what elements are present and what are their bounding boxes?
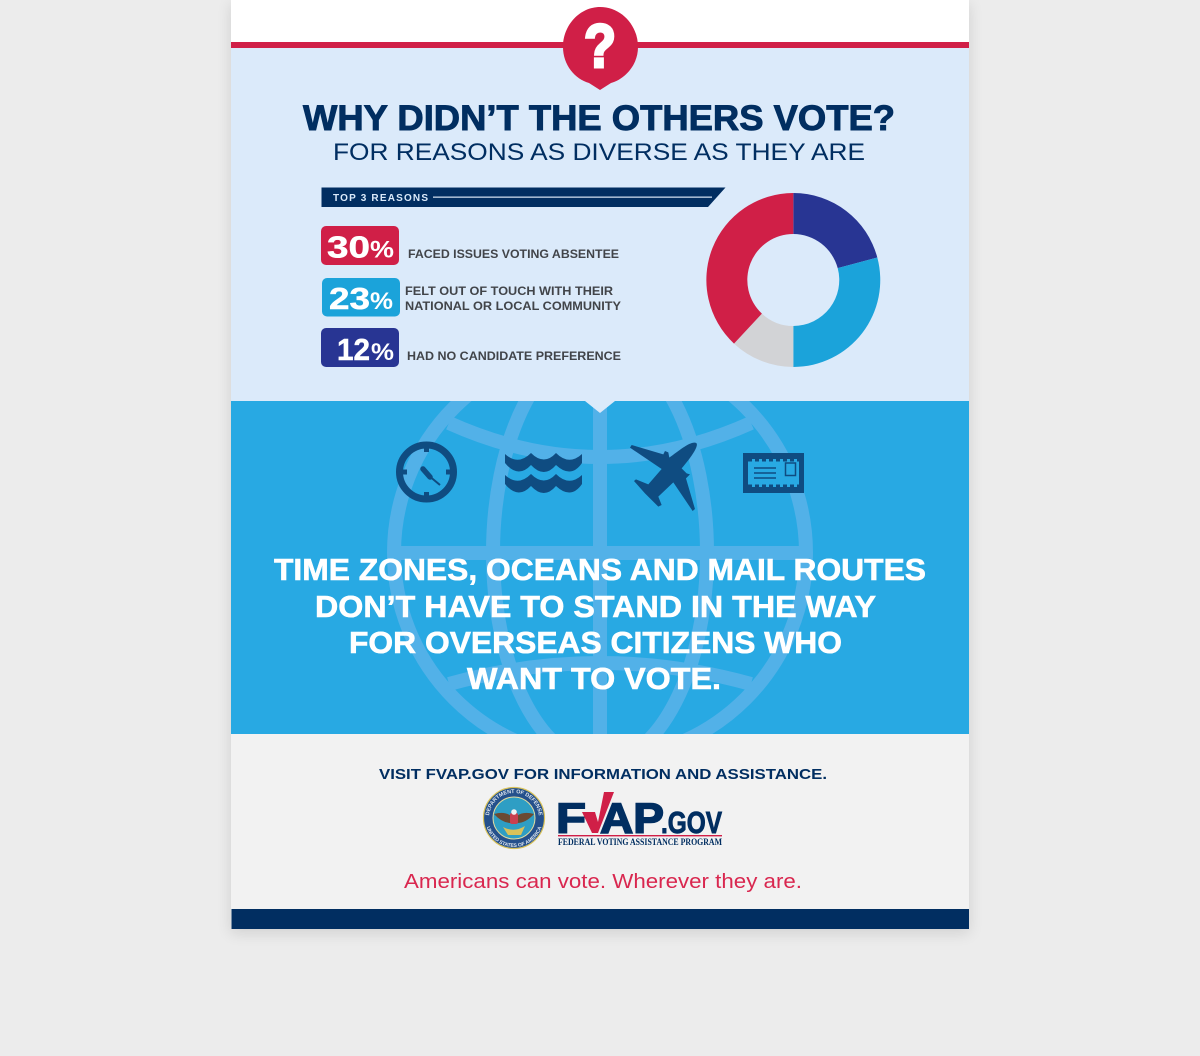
top 3 reasons banner bbox=[322, 188, 726, 207]
subtitle: FOR REASONS AS DIVERSE AS THEY ARE bbox=[333, 139, 865, 166]
main message: FOR OVERSEAS CITIZENS WHO bbox=[349, 625, 842, 660]
bottom navy bar bbox=[232, 909, 969, 929]
icon: ocean waves bbox=[505, 453, 582, 493]
seal: Department of Defense: DEPARTMENT OF DEFENSE bbox=[485, 789, 543, 816]
reason: 23 percent: NATIONAL OR LOCAL COMMUNITY bbox=[405, 299, 621, 313]
icon: question mark pin: ? bbox=[584, 12, 616, 80]
panel: blue message background bbox=[231, 401, 969, 734]
main message: TIME ZONES, OCEANS AND MAIL ROUTES bbox=[274, 552, 926, 587]
main message: WANT TO VOTE. bbox=[467, 661, 721, 696]
logo: FVAP.GOV: F bbox=[556, 795, 586, 843]
logo: FVAP.GOV: .GOV bbox=[661, 805, 722, 840]
reason: 12 percent: HAD NO CANDIDATE PREFERENCE bbox=[407, 349, 621, 363]
reason: 30 percent: % bbox=[370, 236, 394, 264]
reason: 12 percent bbox=[321, 328, 621, 367]
reason: 30 percent: 30 bbox=[327, 230, 370, 264]
seal: Department of Defense bbox=[482, 786, 546, 850]
call to action: VISIT FVAP.GOV FOR INFORMATION AND ASSISTANCE. bbox=[379, 766, 827, 783]
tagline: Americans can vote. Wherever they are. bbox=[404, 871, 802, 893]
logo: FVAP.GOV: AP bbox=[600, 795, 664, 843]
reason: 23 percent bbox=[322, 278, 621, 316]
logo: FVAP.GOV bbox=[556, 792, 722, 847]
reason: 30 percent bbox=[321, 226, 619, 265]
icon: clock bbox=[400, 445, 454, 499]
seal: Department of Defense: UNITED STATES OF AMERICA bbox=[486, 826, 542, 847]
reason: 23 percent: % bbox=[370, 288, 393, 315]
main message: DON’T HAVE TO STAND IN THE WAY bbox=[315, 589, 876, 624]
reason: 12 percent: % bbox=[371, 339, 394, 366]
title: WHY DIDN’T THE OTHERS VOTE? bbox=[303, 99, 895, 138]
icon: question mark pin bbox=[563, 7, 638, 90]
panel: reasons background bbox=[231, 48, 969, 401]
reason: 30 percent: FACED ISSUES VOTING ABSENTEE bbox=[408, 247, 619, 261]
reason: 12 percent: 12 bbox=[337, 332, 370, 367]
main message bbox=[274, 552, 926, 696]
reason: 23 percent: 23 bbox=[329, 281, 370, 316]
logo: FVAP.GOV: FEDERAL VOTING ASSISTANCE PROGRAM bbox=[558, 837, 722, 847]
panel: footer background bbox=[231, 734, 969, 909]
icon: postcard bbox=[743, 453, 804, 493]
red rule bbox=[231, 42, 969, 48]
globe watermark bbox=[387, 401, 813, 734]
top white band bbox=[231, 0, 969, 42]
reason: 23 percent: FELT OUT OF TOUCH WITH THEIR bbox=[405, 284, 613, 298]
donut chart bbox=[706, 193, 880, 367]
top 3 reasons banner: TOP 3 REASONS bbox=[333, 193, 428, 204]
icon: airplane bbox=[630, 443, 697, 511]
callout pointer bbox=[585, 401, 615, 413]
